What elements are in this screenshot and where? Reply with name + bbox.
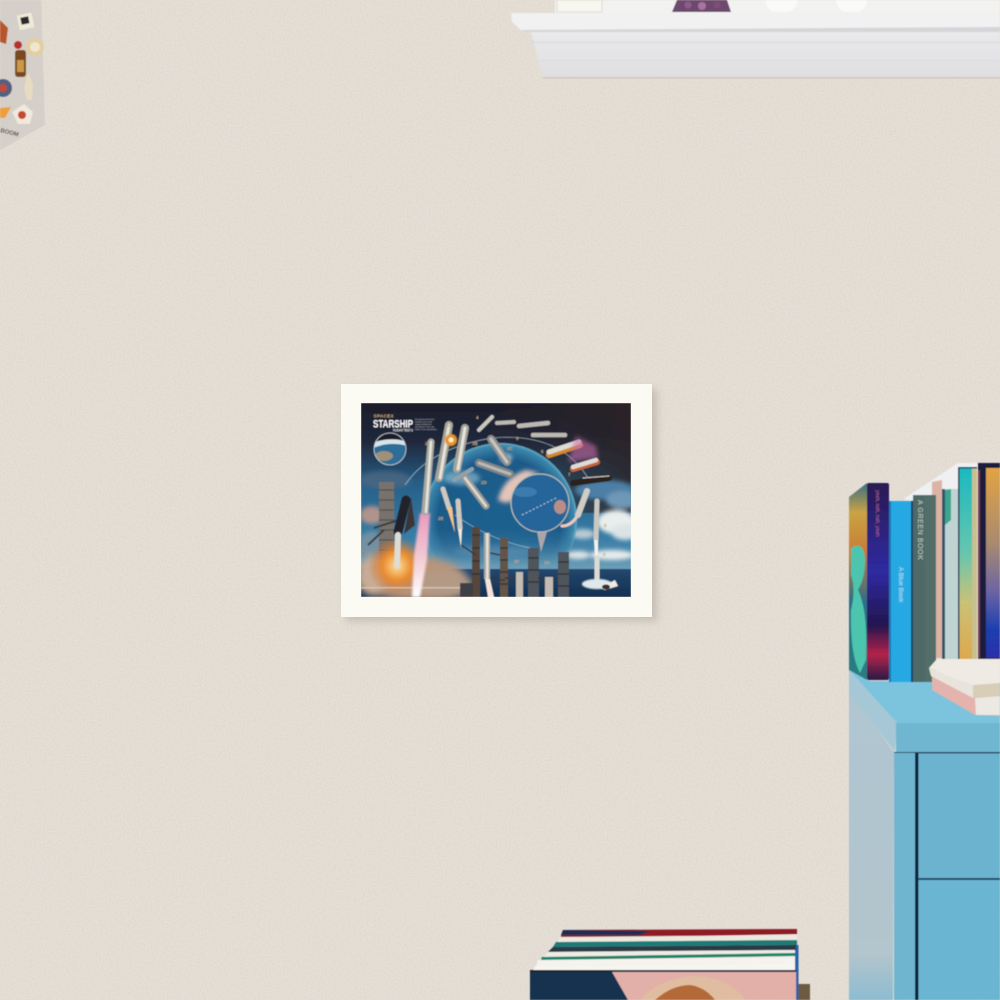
- flight step numbers: 3A: [446, 423, 453, 428]
- flight step numbers: 6: [541, 449, 544, 454]
- flight step numbers: 9: [603, 552, 606, 557]
- book: a blue book: [889, 501, 913, 682]
- title description text: [415, 418, 437, 431]
- flight step numbers: [425, 415, 607, 565]
- drawer one: [918, 754, 1000, 878]
- book: colourful ampersand: yeah, nah, nah, yeah: [874, 490, 880, 537]
- peach book: [932, 480, 942, 658]
- ascending rocket: [425, 442, 431, 512]
- flight step numbers: 2: [425, 441, 428, 446]
- title description text: with booster catch and: [415, 426, 434, 428]
- ship landing burn sequence: [562, 491, 598, 579]
- ship re-entry: [549, 442, 580, 455]
- stacked small books: [929, 659, 1000, 716]
- teal gradient book: [958, 467, 977, 659]
- flight step numbers: 8: [604, 523, 607, 528]
- white slanted book: [905, 463, 977, 500]
- title block: [373, 414, 413, 432]
- title description text: Starship launches from: [415, 418, 435, 421]
- title block: SPACEX: [374, 414, 394, 418]
- drawer two: [918, 880, 1000, 1000]
- title description text: Starbase on its sixth: [415, 420, 432, 424]
- framed print shadow: [346, 389, 657, 621]
- splashdown: [582, 579, 618, 590]
- cabinet side: [849, 690, 894, 1000]
- sky: [361, 403, 631, 570]
- booster flip: [491, 439, 507, 462]
- booster after separation: [457, 428, 465, 469]
- flight step numbers: 2F: [514, 559, 520, 564]
- cabinet front edge: [896, 723, 1000, 752]
- book: a green book: A GREEN BOOK: [916, 500, 923, 560]
- flight step numbers: 2D: [481, 480, 488, 485]
- flight step numbers: 7: [568, 472, 571, 477]
- pennant with enamel pins: [0, 0, 45, 150]
- dark striped book: [978, 463, 1000, 659]
- vase with purple flowers: [672, 0, 731, 12]
- booster descent: [443, 489, 455, 533]
- ship plasma: [568, 436, 598, 469]
- launch smoke and fire: [358, 537, 473, 600]
- inset globe trajectory: [372, 431, 408, 465]
- white mat: [341, 384, 652, 617]
- ascending plume: [412, 513, 430, 597]
- front album cover: [530, 970, 796, 1000]
- poster artwork: [358, 403, 639, 600]
- ship belly flop: [573, 476, 609, 483]
- flight step numbers: 2E: [438, 516, 444, 521]
- books on cabinet: [849, 463, 1000, 716]
- cabinet leg: [894, 753, 915, 1000]
- booster landing at tower: [484, 533, 494, 597]
- concrete pillars: [460, 572, 553, 597]
- title block: FLIGHT TEST 6: [393, 428, 413, 432]
- flight step numbers: 2G: [544, 560, 551, 565]
- book: a blue book: A Blue Book: [897, 567, 904, 603]
- title block: STARSHIP: [373, 418, 413, 430]
- ascending stack and flight-phase vehicles: [425, 417, 609, 548]
- book: colourful ampersand: [849, 483, 889, 680]
- title description text: integrated flight test: [415, 423, 432, 426]
- launch tower: [367, 482, 397, 558]
- pennant with enamel pins: BOOM: [0, 128, 19, 138]
- mint book: [942, 489, 958, 659]
- earth globe: [429, 442, 578, 561]
- title description text: Indian Ocean splashdown: [415, 429, 437, 431]
- stacked vinyl records: [530, 929, 810, 1000]
- clouds: [358, 471, 639, 560]
- wall shelf: [511, 0, 1000, 78]
- flight step numbers: 4: [476, 415, 479, 420]
- flight step numbers: 2C: [507, 446, 514, 451]
- catch towers: [461, 527, 569, 597]
- book: a green book: [913, 495, 936, 682]
- rocket on launch pad: [397, 497, 415, 566]
- sea: [361, 569, 631, 597]
- flight step numbers: 5: [516, 436, 519, 441]
- trajectory arcs: [405, 437, 588, 548]
- ship coast: [479, 417, 565, 435]
- magnified globe lens: [511, 474, 569, 552]
- cabinet top: [849, 670, 1000, 723]
- flight step numbers: 3B: [472, 441, 479, 446]
- blue cabinet: [849, 670, 1000, 1000]
- print: Starship flight test 6: [341, 384, 652, 617]
- hot staging: [439, 425, 457, 478]
